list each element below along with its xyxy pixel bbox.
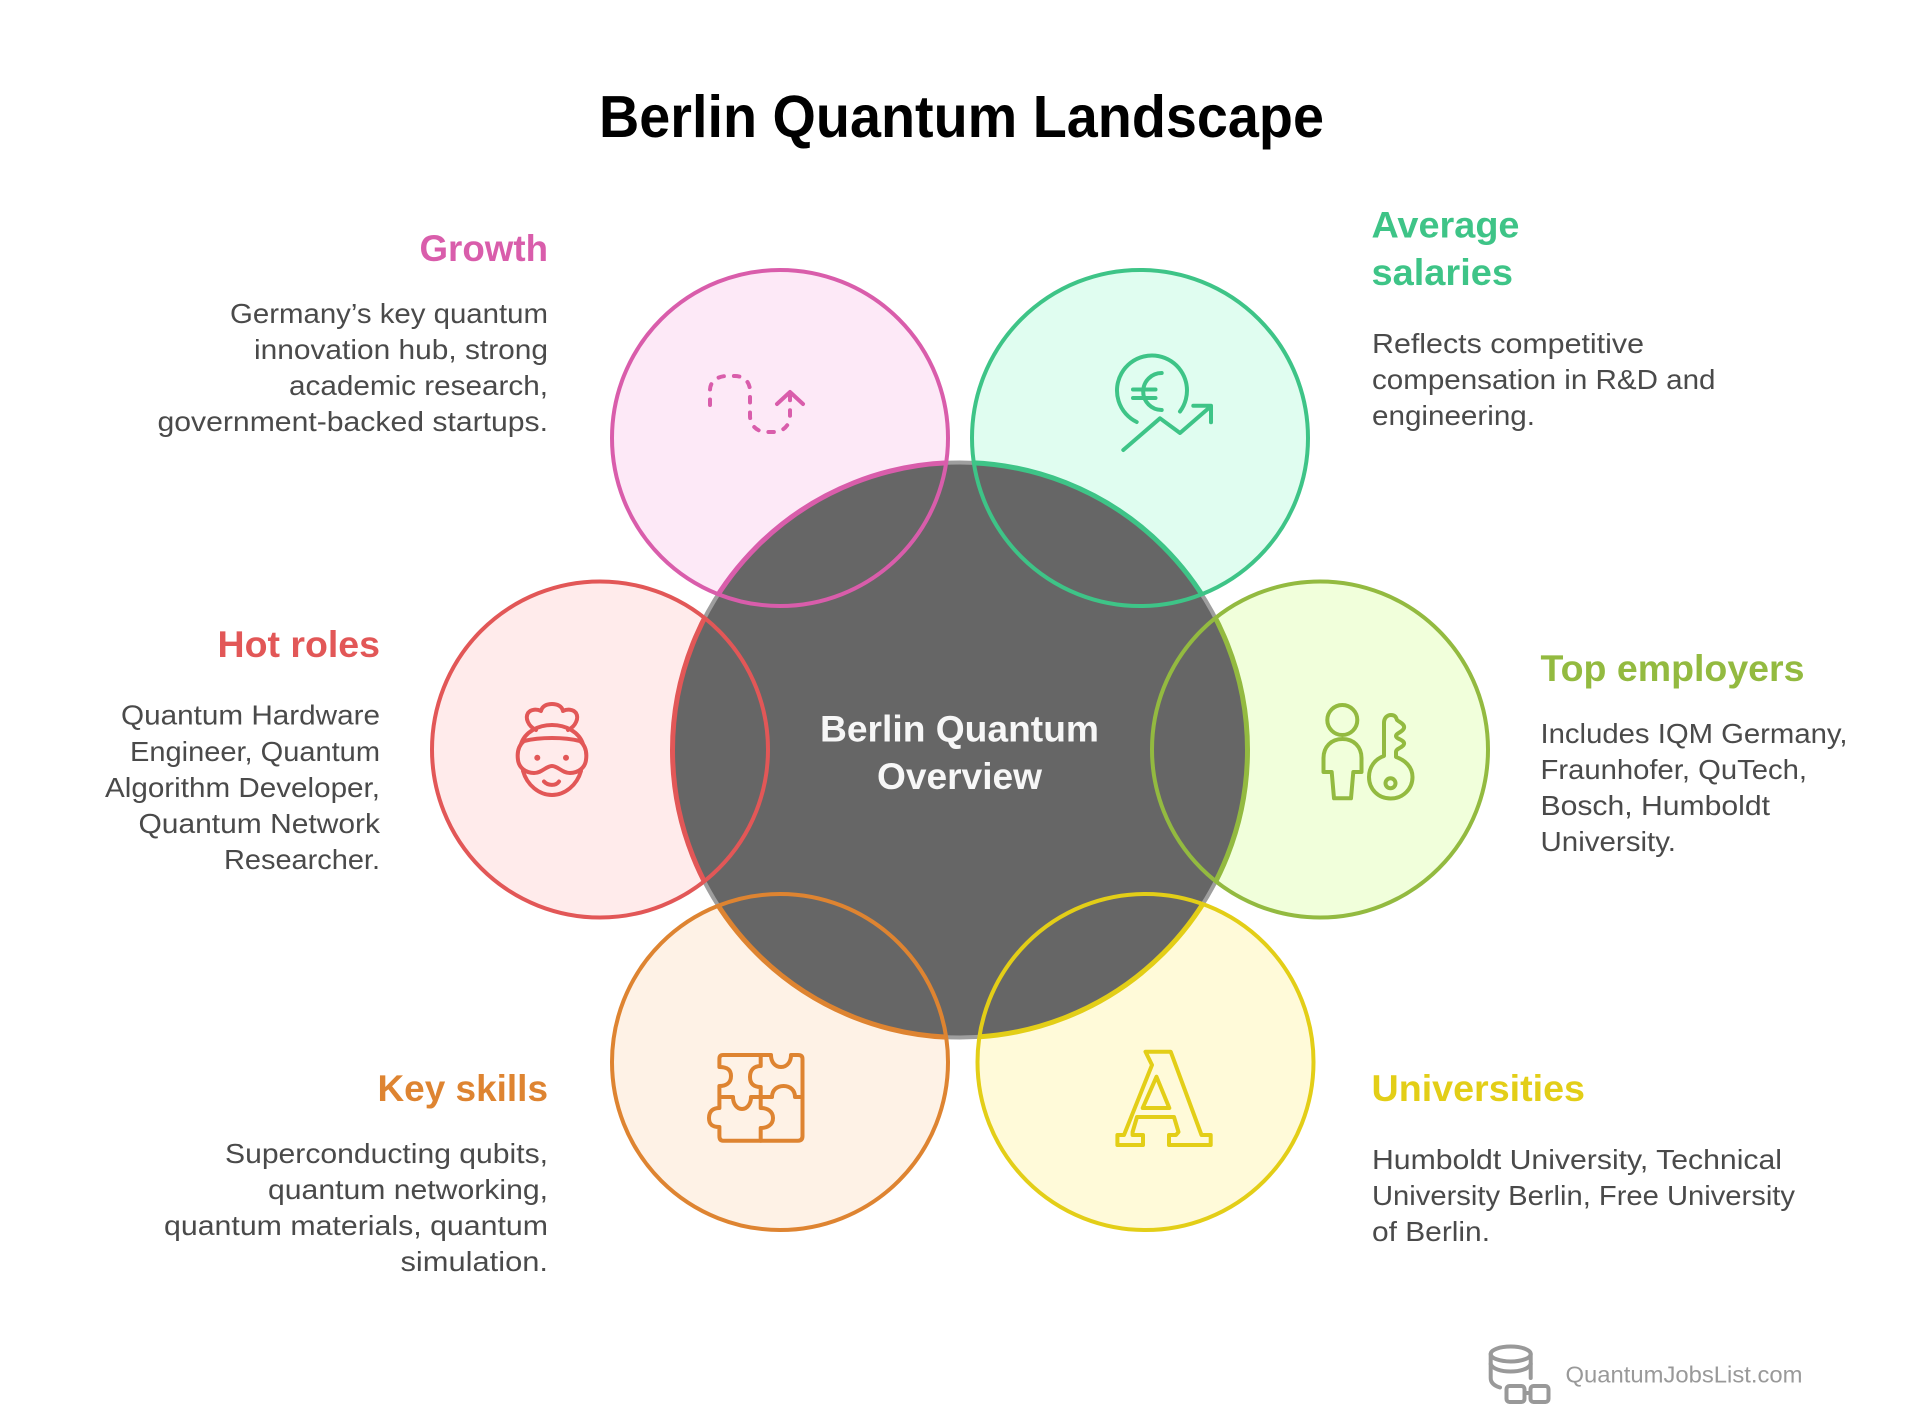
text: salaries description — [1372, 328, 1716, 431]
central label: Berlin Quantum — [820, 708, 1099, 750]
icon: face with mask and hat — [518, 704, 586, 795]
icon: puzzle pieces — [709, 1055, 802, 1141]
text: universities description: of Berlin. — [1372, 1216, 1490, 1247]
icon: database with glasses — [1491, 1346, 1548, 1402]
icon: letter A outline — [1117, 1052, 1211, 1145]
panel: hot roles — [105, 624, 381, 875]
text: universities description: Humboldt University, Technical — [1372, 1144, 1782, 1175]
circle fills — [432, 270, 1488, 1230]
text: top employers description — [1540, 718, 1848, 857]
text: growth description — [158, 298, 548, 437]
text: top employers description: University. — [1540, 826, 1676, 857]
text: top employers description: Includes IQM Germany, — [1540, 718, 1848, 749]
text: key skills description — [164, 1138, 548, 1277]
text: hot roles description: Researcher. — [224, 844, 380, 875]
text: hot roles description: Engineer, Quantum — [130, 736, 380, 767]
venn diagram — [432, 270, 1488, 1230]
text: hot roles description: Quantum Hardware — [121, 700, 380, 730]
panel: key skills — [164, 1068, 548, 1277]
text: top employers description: Fraunhofer, QuTech, — [1540, 754, 1807, 785]
title: Berlin Quantum Landscape — [599, 84, 1324, 150]
text: hot roles description — [105, 700, 381, 875]
heading: average salaries — [1372, 204, 1520, 293]
text: salaries description: engineering. — [1372, 400, 1535, 431]
heading: growth: Growth — [420, 228, 548, 269]
heading: average salaries: salaries — [1372, 252, 1513, 293]
text: hot roles description: Quantum Network — [138, 808, 381, 839]
text: universities description — [1372, 1144, 1795, 1247]
text: growth description: government-backed startups. — [158, 406, 548, 437]
panel: growth — [158, 228, 548, 437]
text: key skills description: quantum networking, — [268, 1174, 548, 1205]
icon: person and key — [1324, 705, 1412, 798]
text: growth description: academic research, — [289, 370, 548, 401]
text: key skills description: simulation. — [400, 1246, 548, 1277]
heading: hot roles: Hot roles — [218, 624, 380, 665]
panel: top employers — [1540, 648, 1848, 857]
panel: universities — [1372, 1068, 1795, 1247]
text: key skills description: Superconducting qubits, — [225, 1138, 548, 1169]
text: key skills description: quantum materials, quantum — [164, 1210, 548, 1241]
heading: universities: Universities — [1372, 1068, 1585, 1109]
panel: average salaries — [1372, 204, 1716, 431]
circle outlines — [432, 270, 1488, 1230]
text: hot roles description: Algorithm Developer, — [105, 772, 380, 803]
heading: key skills: Key skills — [378, 1068, 548, 1109]
central label: Overview — [877, 756, 1042, 797]
text: universities description: University Berlin, Free University — [1372, 1180, 1795, 1211]
text: top employers description: Bosch, Humboldt — [1540, 790, 1770, 821]
text: growth description: innovation hub, strong — [254, 334, 548, 365]
central circle — [672, 462, 1248, 1038]
footer logo — [1491, 1346, 1802, 1402]
heading: average salaries: Average — [1372, 204, 1520, 246]
central label — [820, 708, 1099, 797]
central arcs tinted by overlapping circles — [672, 462, 1248, 1038]
icon: euro coin with rising chart — [1117, 356, 1211, 450]
footer text: QuantumJobsList.com — [1566, 1362, 1802, 1388]
text: growth description: Germany’s key quantum — [230, 298, 548, 329]
icon: dashed path with arrow — [710, 376, 803, 432]
heading: top employers: Top employers — [1540, 648, 1804, 689]
text: salaries description: compensation in R&D and — [1372, 364, 1716, 395]
text: salaries description: Reflects competitive — [1372, 328, 1644, 359]
